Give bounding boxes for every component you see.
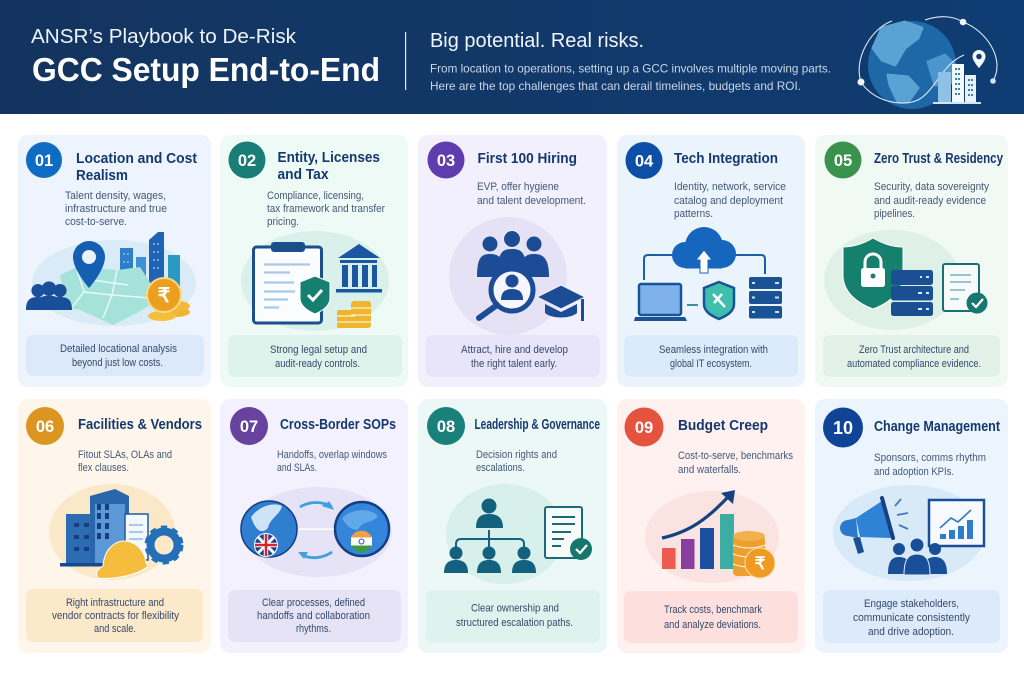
description: Handoffs, overlap windows [277,449,387,461]
takeaway box: and scale. [94,623,136,635]
description: Talent density, wages, [65,190,166,202]
heading: Budget Creep [678,418,768,434]
description [874,452,986,478]
description: Security, data sovereignty [874,181,989,193]
number badge 06 [26,407,64,445]
description [476,449,557,474]
takeaway box: communicate consistently [853,612,970,624]
heading: Location and Cost [76,151,197,167]
icon: megaphone, chart board and team [833,485,985,581]
panel: 03 first 100 hiring [418,135,607,387]
takeaway box [426,335,600,377]
description [477,181,586,207]
number badge 01 [26,142,62,178]
header intro text [430,30,831,93]
takeaway box [26,335,204,376]
panel: 08 leadership and governance [418,399,607,653]
description: catalog and deployment [674,195,783,207]
takeaway box: global IT ecosystem. [670,358,752,370]
icon: people, magnifier and graduation cap [449,217,585,335]
takeaway box: vendor contracts for flexibility [52,610,179,622]
takeaway box: Zero Trust architecture and [859,344,969,356]
takeaway box: and drive adoption. [868,626,954,638]
number badge 05 [824,142,862,178]
description: Cost-to-serve, benchmarks [678,450,793,462]
heading: Realism [76,168,128,184]
panel: 07 cross-border sops [220,399,408,653]
description [678,450,793,476]
number badge 05: 05 [834,152,852,170]
number badge 07 [230,407,268,445]
takeaway box: Track costs, benchmark [664,604,762,616]
header intro text: From location to operations, setting up a GCC involves multiple moving parts. [430,62,831,76]
takeaway box: Strong legal setup and [270,344,367,356]
description: Compliance, licensing, [267,190,364,202]
takeaway box [823,590,1000,643]
number badge 08 [427,407,465,445]
takeaway box [624,335,798,377]
takeaway box: and analyze deviations. [664,619,761,631]
icon: rising bars, arrow and coins: ₹ [755,554,766,573]
panel: 04 tech integration [617,135,805,387]
panel: 09 budget creep [617,399,805,653]
number badge 06: 06 [36,418,54,436]
heading: Change Management [874,419,1000,435]
number badge 03 [428,142,464,178]
heading: Facilities & Vendors [78,417,202,433]
icon: clipboard, shield, bank and coins [241,231,389,331]
takeaway box: the right talent early. [471,358,557,370]
description [874,181,989,220]
panel: 05 zero trust and residency [815,135,1008,387]
heading: Tech Integration [674,151,778,167]
description [78,449,172,474]
description [65,190,167,228]
heading: Cross-Border SOPs [280,417,396,433]
takeaway box: Seamless integration with [659,344,768,356]
icon: shield, lock, servers and document [824,230,988,330]
icon: UK flag [254,534,278,556]
takeaway box: audit-ready controls. [275,358,360,370]
description: flex clauses. [78,462,129,474]
description: Sponsors, comms rhythm [874,452,986,464]
header banner [0,0,1024,114]
heading [278,150,380,183]
title [31,25,380,88]
description: tax framework and transfer [267,203,385,215]
number badge 10: 10 [833,418,853,438]
icon: two globes with UK and India flags [241,487,392,577]
icon: India flag [351,531,372,552]
takeaway box [426,590,600,643]
icon: org chart and checked document [444,484,592,584]
description: and adoption KPIs. [874,466,954,478]
description [277,449,387,474]
icon: globe with city [858,17,997,109]
takeaway box: handoffs and collaboration [257,610,370,622]
description: patterns. [674,208,713,220]
number badge 10 [823,408,863,448]
title: GCC Setup End-to-End [32,51,380,88]
number badge 04: 04 [635,152,654,170]
description: Decision rights and [476,449,557,461]
takeaway box [823,335,1000,377]
heading [76,151,197,184]
description: cost-to-serve. [65,216,127,228]
number badge 02 [228,142,266,178]
description: EVP, offer hygiene [477,181,559,193]
takeaway box: Engage stakeholders, [864,598,959,610]
number badge 09 [624,408,664,446]
takeaway box: Right infrastructure and [66,597,164,609]
takeaway box: beyond just low costs. [72,357,163,369]
icon: map, pin, city, coin and people: ₹ [158,285,171,307]
description: infrastructure and true [65,203,167,215]
header intro text: Big potential. Real risks. [430,30,644,52]
takeaway box [228,335,402,377]
number badge 03: 03 [437,152,455,170]
description: and audit-ready evidence [874,195,986,207]
takeaway box: rhythms. [296,623,331,635]
number badge 01: 01 [35,152,53,170]
icon: buildings, hard hat and gear [49,484,181,580]
description: pipelines. [874,208,915,220]
number badge 02: 02 [238,152,256,170]
takeaway box [624,591,798,643]
description: Identity, network, service [674,181,786,193]
takeaway box [26,589,203,642]
icon: map, pin, city, coin and people [26,232,196,326]
number badge 04 [626,142,662,179]
takeaway box [228,590,401,642]
heading: Entity, Licenses [278,150,380,166]
takeaway box: automated compliance evidence. [847,358,981,370]
icon: rising bars, arrow and coins [645,490,779,583]
heading: and Tax [278,167,328,183]
number badge 09: 09 [635,419,653,437]
description: and waterfalls. [678,464,741,476]
description: escalations. [476,462,525,474]
takeaway box: Clear ownership and [471,602,559,614]
description: pricing. [267,216,299,228]
panel: 01 location and cost realism [18,135,211,387]
description [267,190,385,228]
number badge 08: 08 [437,418,455,436]
description: Fitout SLAs, OLAs and [78,449,172,461]
takeaway box: Attract, hire and develop [461,344,568,356]
panel: 10 change management [815,399,1008,653]
heading: First 100 Hiring [478,151,577,167]
takeaway box: structured escalation paths. [456,617,573,629]
takeaway box: Detailed locational analysis [60,343,177,355]
heading: Leadership & Governance [474,417,600,433]
takeaway box: Clear processes, defined [262,597,365,609]
title: ANSR’s Playbook to De-Risk [31,25,297,48]
icon: cloud, laptop, shield and servers [634,227,782,321]
panel: 02 entity, licenses and tax [220,135,408,387]
description: and talent development. [477,195,586,207]
description [674,181,786,220]
panel: 06 facilities and vendors [18,399,211,653]
description: and SLAs. [277,462,317,474]
number badge 07: 07 [240,418,258,436]
header intro text: Here are the top challenges that can derail timelines, budgets and ROI. [430,79,801,93]
